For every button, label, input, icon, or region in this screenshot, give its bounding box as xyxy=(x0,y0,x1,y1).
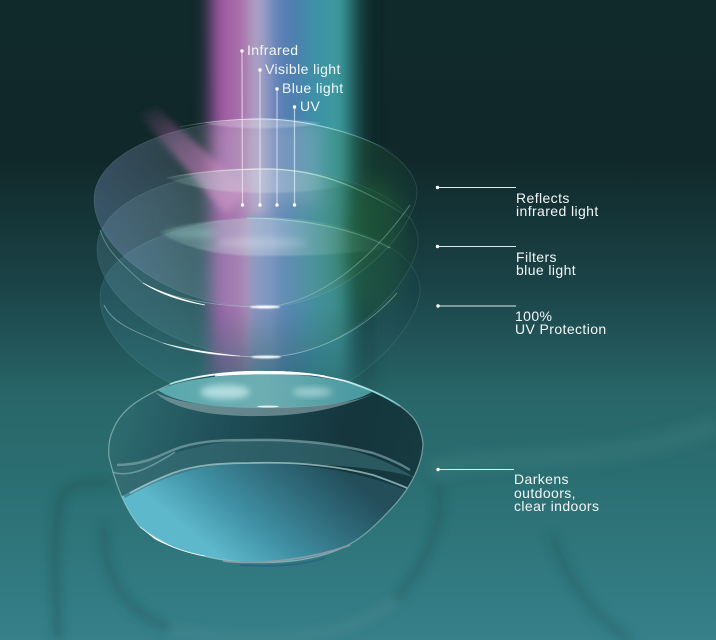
callout: darkens outdoors: Darkens xyxy=(514,471,569,487)
base lens rim xyxy=(109,372,423,563)
lens layer 1: infrared reflector xyxy=(94,119,417,308)
UV label: UV xyxy=(300,98,321,114)
lens 1 lower rim xyxy=(100,205,410,307)
lens layer 4: photochromic base lens xyxy=(100,372,430,580)
base lens curved reflections xyxy=(117,440,410,470)
callout: reflects infrared light: infrared light xyxy=(516,203,599,219)
lens layer 3: UV protection xyxy=(100,218,420,406)
base lens lower bright area xyxy=(122,463,406,562)
base lens top reflection xyxy=(158,374,372,408)
callout: reflects infrared light: Reflects xyxy=(516,190,570,206)
callout: UV protection: UV Protection xyxy=(515,321,607,337)
base lens band xyxy=(108,440,415,498)
lens 2 lower rim xyxy=(104,293,397,357)
callout: darkens outdoors: clear indoors xyxy=(514,498,599,514)
light beam xyxy=(198,0,373,384)
UV stem xyxy=(293,105,296,207)
callout: UV protection: 100% xyxy=(515,308,552,324)
green tint right of beam xyxy=(345,180,405,310)
Infrared stem xyxy=(240,49,244,207)
lens layer 2: blue light filter xyxy=(97,169,418,358)
callout: UV protection xyxy=(436,304,607,337)
callout: filters blue light: Filters xyxy=(516,249,557,265)
Visible light label: Visible light xyxy=(265,61,341,77)
callout: filters blue light xyxy=(436,245,576,278)
callout: filters blue light: blue light xyxy=(516,262,576,278)
callout: darkens outdoors xyxy=(436,468,599,514)
callout: reflects infrared light xyxy=(436,186,599,219)
Blue light label: Blue light xyxy=(282,80,344,96)
callout: darkens outdoors: outdoors, xyxy=(514,485,576,501)
reflected pink beam xyxy=(138,108,250,214)
label stems and top labels xyxy=(240,42,344,207)
blurred eyeglasses frame xyxy=(55,425,716,640)
Visible light stem xyxy=(258,68,262,207)
Blue light stem xyxy=(275,87,279,207)
Infrared label: Infrared xyxy=(247,42,298,58)
